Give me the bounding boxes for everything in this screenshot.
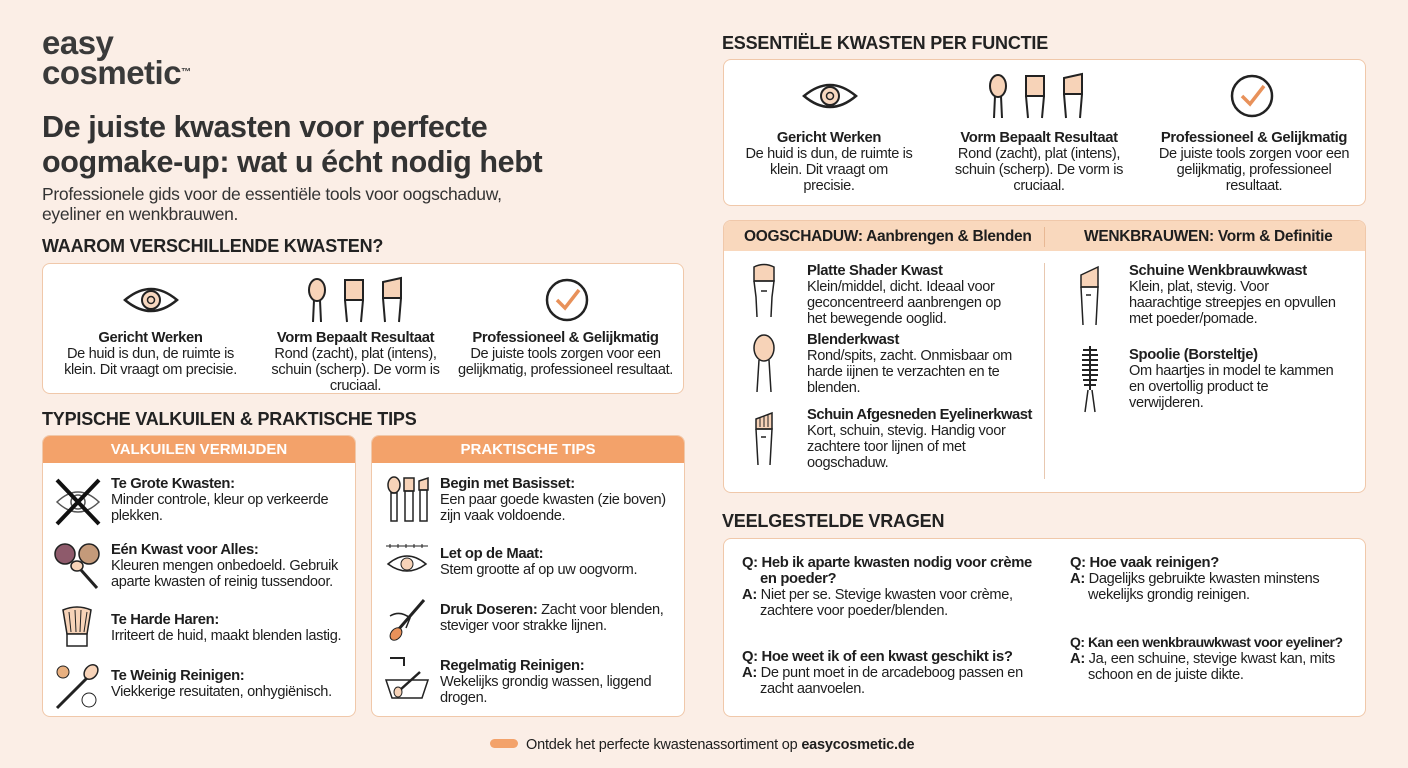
panel: essentiele (723, 59, 1366, 206)
faq 2: A: De punt moet in de arcadeboog passen en (742, 665, 1023, 681)
panel: valkuilen (42, 435, 356, 717)
title: oogmake-up: wat u écht nodig hebt (42, 145, 542, 179)
text: gericht werken: Gericht Werken (98, 330, 203, 346)
logo: cosmetic™ (42, 54, 191, 91)
text: te weinig: Te Weinig Reinigen: (111, 668, 244, 684)
text: schuine wenkbrauwkwast: Klein, plat, stevig. Voor (1129, 279, 1269, 295)
text: blenderkwast: Blenderkwast (807, 332, 899, 348)
icon: eyeliner brush (755, 412, 773, 465)
text: reinigen: Wekelijks grondig wassen, liggend drogen. (440, 674, 651, 706)
icon: brushes (308, 276, 402, 322)
logo: easy (42, 24, 113, 61)
text: te grote (111, 476, 328, 524)
faq 1: Q: Heb ik aparte kwasten nodig voor crème A: Niet per se. Stevige kwasten voor crème, (742, 555, 1032, 603)
text: spoolie: verwijderen. (1129, 395, 1203, 411)
text: vorm: Rond (zacht), plat (intens), schuin (scherp). De vorm is cruciaal. (271, 346, 440, 394)
title: De juiste kwasten voor perfecte (42, 110, 487, 144)
panel: tips (371, 435, 685, 717)
faq 4: A: Ja, een schuine, stevige kwast kan, mits (1070, 651, 1335, 667)
text: professioneel (458, 330, 673, 378)
header bar: OOGSCHADUW: Aanbrengen & Blenden (744, 228, 1032, 245)
subtitle: Professionele gids voor de essentiële tools voor oogschaduw, (42, 184, 502, 204)
text: reinigen: Regelmatig Reinigen: (440, 658, 584, 674)
text: gericht (745, 130, 913, 194)
text: te weinig: Viekkerige resuitaten, onhygiënisch. (111, 684, 332, 700)
faq 3: wekelijks grondig reinigen. (1088, 587, 1250, 603)
text: blenderkwast: Rond/spits, zacht. Onmisbaar om harde iijnen te verzachten en te blenden. (807, 348, 1012, 396)
heading: valkuilen: TYPISCHE VALKUILEN & PRAKTISCHE TIPS (42, 409, 417, 429)
icon: cross eye (56, 478, 100, 526)
faq 4: Q: Kan een wenkbrauwkwast voor eyeliner? (1070, 634, 1343, 650)
icon: flat shader (753, 264, 775, 317)
text: gericht: Gericht Werken (777, 130, 881, 146)
header bar (724, 221, 1365, 251)
header bar: WENKBRAUWEN: Vorm & Definitie (1084, 228, 1332, 245)
text: vorm: Vorm Bepaalt Resultaat (960, 130, 1118, 146)
faq 1: zachtere voor poeder/blenden. (760, 603, 948, 619)
text: spoolie: Spoolie (Borsteltje) (1129, 347, 1258, 363)
subtitle (42, 184, 502, 224)
text: gericht werken (64, 330, 237, 378)
text: een kwast: Kleuren mengen onbedoeld. Gebruik aparte kwasten of reinig tussendoor. (111, 558, 338, 590)
text: gericht werken: De huid is dun, de ruimte is klein. Dit vraagt om precisie. (64, 346, 237, 378)
text: maat: Stem grootte af op uw oogvorm. (440, 562, 637, 578)
text: te harde: Te Harde Haren: (111, 612, 219, 628)
faq 3: A: Dagelijks gebruikte kwasten minstens (1070, 571, 1319, 587)
text: te weinig (111, 668, 332, 700)
text: platte shader: Platte Shader Kwast (807, 263, 943, 279)
heading: waarom: WAAROM VERSCHILLENDE KWASTEN? (42, 236, 383, 256)
icon: sink (385, 657, 429, 699)
text: spoolie: Om haartjes in model te kammen (1129, 363, 1333, 379)
icon: check (1230, 74, 1274, 118)
panel: faq (723, 538, 1366, 717)
icon: brush set (387, 476, 429, 522)
text: een kwast: Eén Kwast voor Alles: (111, 542, 259, 558)
text: gericht: De huid is dun, de ruimte is (745, 146, 913, 162)
text: maat: Let op de Maat: (440, 546, 543, 562)
text: professioneel: Professioneel & Gelijkmatig (1161, 130, 1347, 146)
header: tips: PRAKTISCHE TIPS (460, 441, 596, 458)
heading: faq: VEELGESTELDE VRAGEN (722, 511, 944, 531)
faq 3 (1070, 555, 1360, 603)
text: spoolie: en overtollig product te (1129, 379, 1268, 395)
faq 2: zacht aanvoelen. (760, 681, 865, 697)
text: spoolie (1129, 347, 1359, 411)
icon: angled brow brush (1080, 266, 1099, 325)
text: eyelinerkwast: Kort, schuin, stevig. Handig voor zachtere toor lijnen of met oogschaduw. (807, 423, 1006, 471)
text: eyelinerkwast: Schuin Afgesneden Eyelinerkwast (807, 407, 1032, 423)
header: valkuilen: VALKUILEN VERMIJDEN (111, 441, 287, 458)
text: basisset (440, 476, 666, 524)
icon: ruler eye (386, 544, 428, 572)
icon: palette (54, 543, 100, 589)
text: vorm: Vorm Bepaalt Resultaat (277, 330, 434, 346)
icon: dirty brush (56, 664, 99, 709)
text: te harde: Irriteert de huid, maakt blenden lastig. (111, 628, 341, 644)
icon: eye (123, 288, 179, 312)
text: basisset: Begin met Basisset: (440, 476, 575, 492)
icon: spoolie (1082, 346, 1098, 412)
panel: waarom (42, 263, 684, 394)
text: schuine wenkbrauwkwast: met poeder/pomade. (1129, 311, 1257, 327)
text: schuine wenkbrauwkwast: Schuine Wenkbrauwkwast (1129, 263, 1307, 279)
text: reinigen (440, 658, 651, 706)
text: professioneel: De juiste tools zorgen voor een gelijkmatig, professioneel resultaat. (458, 346, 673, 378)
text: professioneel: Professioneel & Gelijkmatig (472, 330, 659, 346)
text: gericht: klein. Dit vraagt om (770, 162, 888, 178)
logo (42, 24, 191, 91)
icon: eye (802, 84, 858, 108)
header: tips (372, 436, 684, 463)
text: schuine wenkbrauwkwast (1129, 263, 1336, 327)
icon: check (546, 278, 588, 322)
text: te harde (111, 612, 341, 644)
text: druk: Druk Doseren: Zacht voor blenden, steviger voor strakke lijnen. (440, 602, 663, 634)
text: een kwast (111, 542, 338, 590)
footer: Ontdek het perfecte kwastenassortiment op easycosmetic.de (526, 737, 914, 753)
faq 2 (742, 649, 1052, 697)
faq 1: en poeder? (760, 571, 836, 587)
subtitle: eyeliner en wenkbrauwen. (42, 204, 238, 224)
text: eyelinerkwast (807, 407, 1032, 471)
text: professioneel: De juiste tools zorgen voor een gelijkmatig, professioneel resultaat. (1159, 146, 1349, 194)
panel: oogschaduw & wenkbrauwen (723, 220, 1366, 493)
text: platte shader: Klein/middel, dicht. Ideaal voor geconcentreerd aanbrengen op het bewegende ooglid. (807, 279, 1001, 327)
heading: essentiele: ESSENTIËLE KWASTEN PER FUNCTIE (722, 33, 1048, 53)
text: te grote: Te Grote Kwasten: (111, 476, 235, 492)
text: maat (440, 546, 637, 578)
faq 4: schoon en de juiste dikte. (1088, 667, 1244, 683)
icon: hand brush (390, 599, 425, 641)
icon: hard brush (62, 606, 92, 647)
icon: blender (753, 334, 775, 392)
text: vorm: Rond (zacht), plat (intens), schuin (scherp). De vorm is cruciaal. (955, 146, 1123, 194)
text: te grote: Minder controle, kleur op verkeerde plekken. (111, 492, 328, 524)
faq 3: Q: Hoe vaak reinigen? (1070, 555, 1219, 571)
icon: brushes (989, 72, 1083, 118)
text: basisset: Een paar goede kwasten (zie boven) zijn vaak voldoende. (440, 492, 666, 524)
title (42, 110, 542, 179)
header: valkuilen (43, 436, 355, 463)
faq 2: Q: Hoe weet ik of een kwast geschikt is? (742, 649, 1013, 665)
faq 4 (1070, 634, 1360, 683)
text: gericht: precisie. (803, 178, 855, 194)
text: schuine wenkbrauwkwast: haarachtige streepjes en opvullen (1129, 295, 1336, 311)
